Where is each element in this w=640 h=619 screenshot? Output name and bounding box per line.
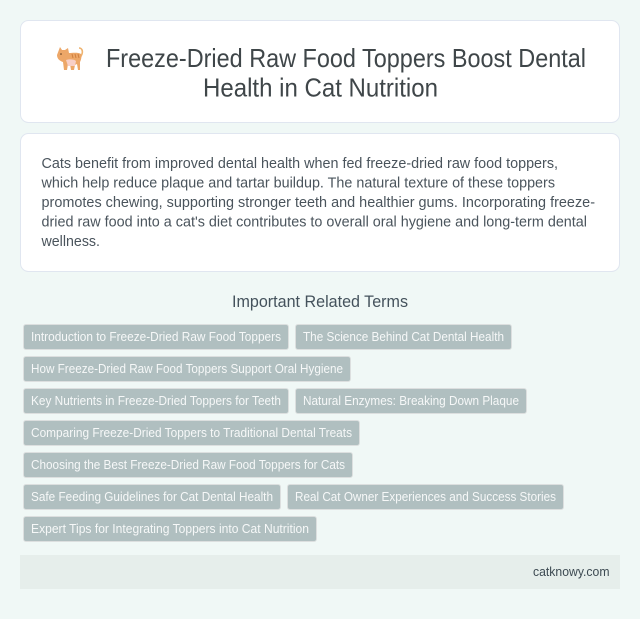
heading: related terms: Important Related Terms — [232, 293, 408, 311]
title: Health in Cat Nutrition — [203, 72, 438, 102]
tag — [24, 324, 288, 350]
tag — [288, 484, 564, 510]
tag: Expert Tips for Integrating Toppers into Cat Nutrition — [31, 521, 309, 536]
tag: Key Nutrients in Freeze-Dried Toppers for Teeth — [31, 393, 281, 408]
tag — [24, 452, 352, 478]
tag: Safe Feeding Guidelines for Cat Dental Health — [31, 489, 273, 504]
footer — [20, 555, 620, 589]
panel: description card — [20, 134, 620, 272]
title — [106, 43, 586, 102]
tag: Choosing the Best Freeze-Dried Raw Food Toppers for Cats — [31, 457, 345, 472]
tag: Comparing Freeze-Dried Toppers to Traditional Dental Treats — [31, 425, 352, 440]
tag — [296, 388, 526, 414]
text block: description: which help reduce plaque and tartar buildup. The natural texture of these toppers — [41, 174, 555, 192]
tag — [24, 484, 280, 510]
icon: cat — [57, 47, 82, 70]
text block: description: dried raw food into a cat's diet contributes to overall oral hygiene and long-term dental — [42, 214, 587, 230]
tag: Introduction to Freeze-Dried Raw Food Toppers — [31, 329, 281, 344]
text block: description: Cats benefit from improved dental health when fed freeze-dried raw food toppers, — [42, 155, 558, 172]
text block: description: wellness. — [41, 233, 100, 250]
tag — [24, 388, 288, 414]
tag — [24, 356, 350, 382]
text block: description — [41, 155, 595, 250]
tag: How Freeze-Dried Raw Food Toppers Support Oral Hygiene — [31, 361, 343, 376]
panel: title card — [20, 20, 620, 122]
tag: Real Cat Owner Experiences and Success Stories — [295, 489, 556, 504]
tag list — [24, 324, 564, 542]
text block: description: promotes chewing, supporting stronger teeth and healthier gums. Incorporating freeze- — [42, 194, 595, 211]
footer: catknowy.com — [533, 564, 610, 579]
tag — [24, 420, 360, 446]
tag: Natural Enzymes: Breaking Down Plaque — [303, 393, 519, 408]
title: Freeze-Dried Raw Food Toppers Boost Dental — [106, 43, 586, 73]
tag: The Science Behind Cat Dental Health — [303, 329, 504, 344]
tag — [296, 324, 512, 350]
tag — [24, 516, 316, 542]
